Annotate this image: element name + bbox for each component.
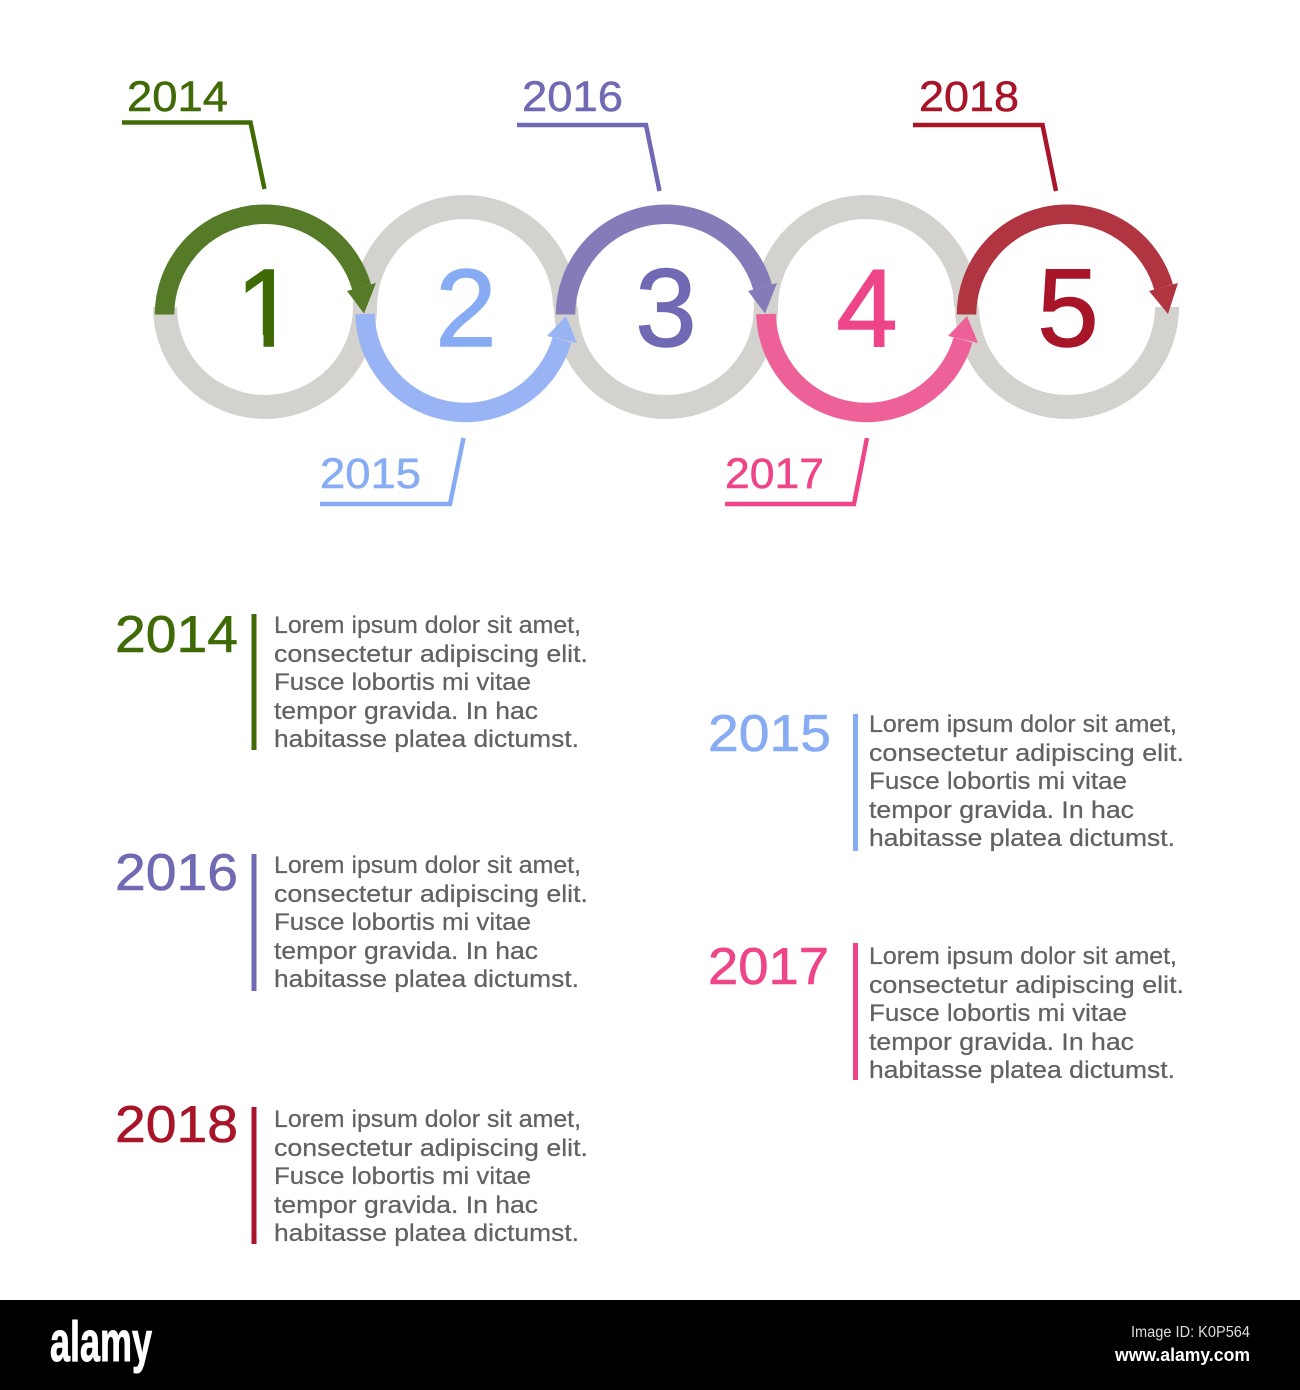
text block 2017: Lorem ipsum dolor sit amet,: [869, 943, 1177, 970]
text block 2017: tempor gravida. In hac: [869, 1029, 1134, 1056]
step 3 arrow: purple: [566, 214, 777, 314]
step number 4: 4: [836, 247, 898, 370]
text block 2015: Lorem ipsum dolor sit amet,: [869, 711, 1177, 738]
text block 2017: Fusce lobortis mi vitae: [869, 1000, 1127, 1027]
text block 2016: [115, 844, 588, 993]
text block 2014: tempor gravida. In hac: [274, 698, 538, 725]
text block 2017: 2017: [708, 938, 829, 996]
callout 2018: 2018: [919, 73, 1019, 121]
text block 2016: Fusce lobortis mi vitae: [274, 909, 531, 936]
text block 2014: consectetur adipiscing elit.: [274, 641, 588, 668]
text block 2018: consectetur adipiscing elit.: [274, 1135, 588, 1162]
text block 2017: consectetur adipiscing elit.: [869, 972, 1184, 999]
text block 2018: 2018: [115, 1096, 238, 1154]
grey ring segments: [165, 207, 1167, 407]
text block 2015: [708, 705, 1184, 852]
callout 2014: [122, 73, 264, 189]
text block 2015: consectetur adipiscing elit.: [869, 740, 1184, 767]
website: www.alamy.com: [1114, 1345, 1250, 1365]
step 5 arrow: red: [966, 214, 1178, 314]
step 4 arrow: pink: [766, 314, 978, 412]
text block 2016: tempor gravida. In hac: [274, 938, 538, 965]
text block 2018: [115, 1096, 588, 1247]
callout 2015: [320, 438, 464, 504]
text block 2018: habitasse platea dictumst.: [274, 1220, 579, 1247]
footer logo: alamy: [50, 1310, 152, 1374]
text block 2016: consectetur adipiscing elit.: [274, 881, 588, 908]
text block 2018: Fusce lobortis mi vitae: [274, 1163, 531, 1190]
text block 2015: 2015: [708, 705, 831, 763]
footer watermark bar: [0, 1300, 1300, 1390]
text block 2014: 2014: [115, 606, 238, 664]
text block 2018: tempor gravida. In hac: [274, 1192, 538, 1219]
text block 2016: habitasse platea dictumst.: [274, 966, 579, 993]
callout 2014: 2014: [127, 73, 228, 121]
text block 2014: Lorem ipsum dolor sit amet,: [274, 612, 581, 639]
text block 2017: [708, 938, 1184, 1084]
step 1 arrow: green: [164, 214, 376, 314]
text block 2015: Fusce lobortis mi vitae: [869, 768, 1127, 795]
callout 2017: 2017: [725, 450, 824, 498]
text block 2014: Fusce lobortis mi vitae: [274, 669, 531, 696]
callout 2017: [725, 438, 867, 504]
step 2 arrow: blue: [365, 314, 577, 412]
step number 3: 3: [635, 247, 697, 370]
step number 2: 2: [435, 247, 497, 370]
text block 2015: tempor gravida. In hac: [869, 797, 1134, 824]
text block 2014: [115, 606, 588, 753]
text block 2018: Lorem ipsum dolor sit amet,: [274, 1106, 581, 1133]
text block 2016: Lorem ipsum dolor sit amet,: [274, 852, 581, 879]
callout 2016: 2016: [522, 73, 623, 121]
step number 1: 1: [236, 247, 297, 370]
text block 2014: habitasse platea dictumst.: [274, 726, 579, 753]
text block 2016: 2016: [115, 844, 238, 902]
text block 2015: habitasse platea dictumst.: [869, 825, 1175, 852]
text block 2017: habitasse platea dictumst.: [869, 1057, 1175, 1084]
callout 2016: [517, 73, 660, 191]
step number 5: 5: [1037, 247, 1099, 370]
image id: Image ID: K0P564: [1131, 1324, 1250, 1341]
callout 2018: [913, 73, 1056, 191]
callout 2015: 2015: [320, 450, 421, 498]
